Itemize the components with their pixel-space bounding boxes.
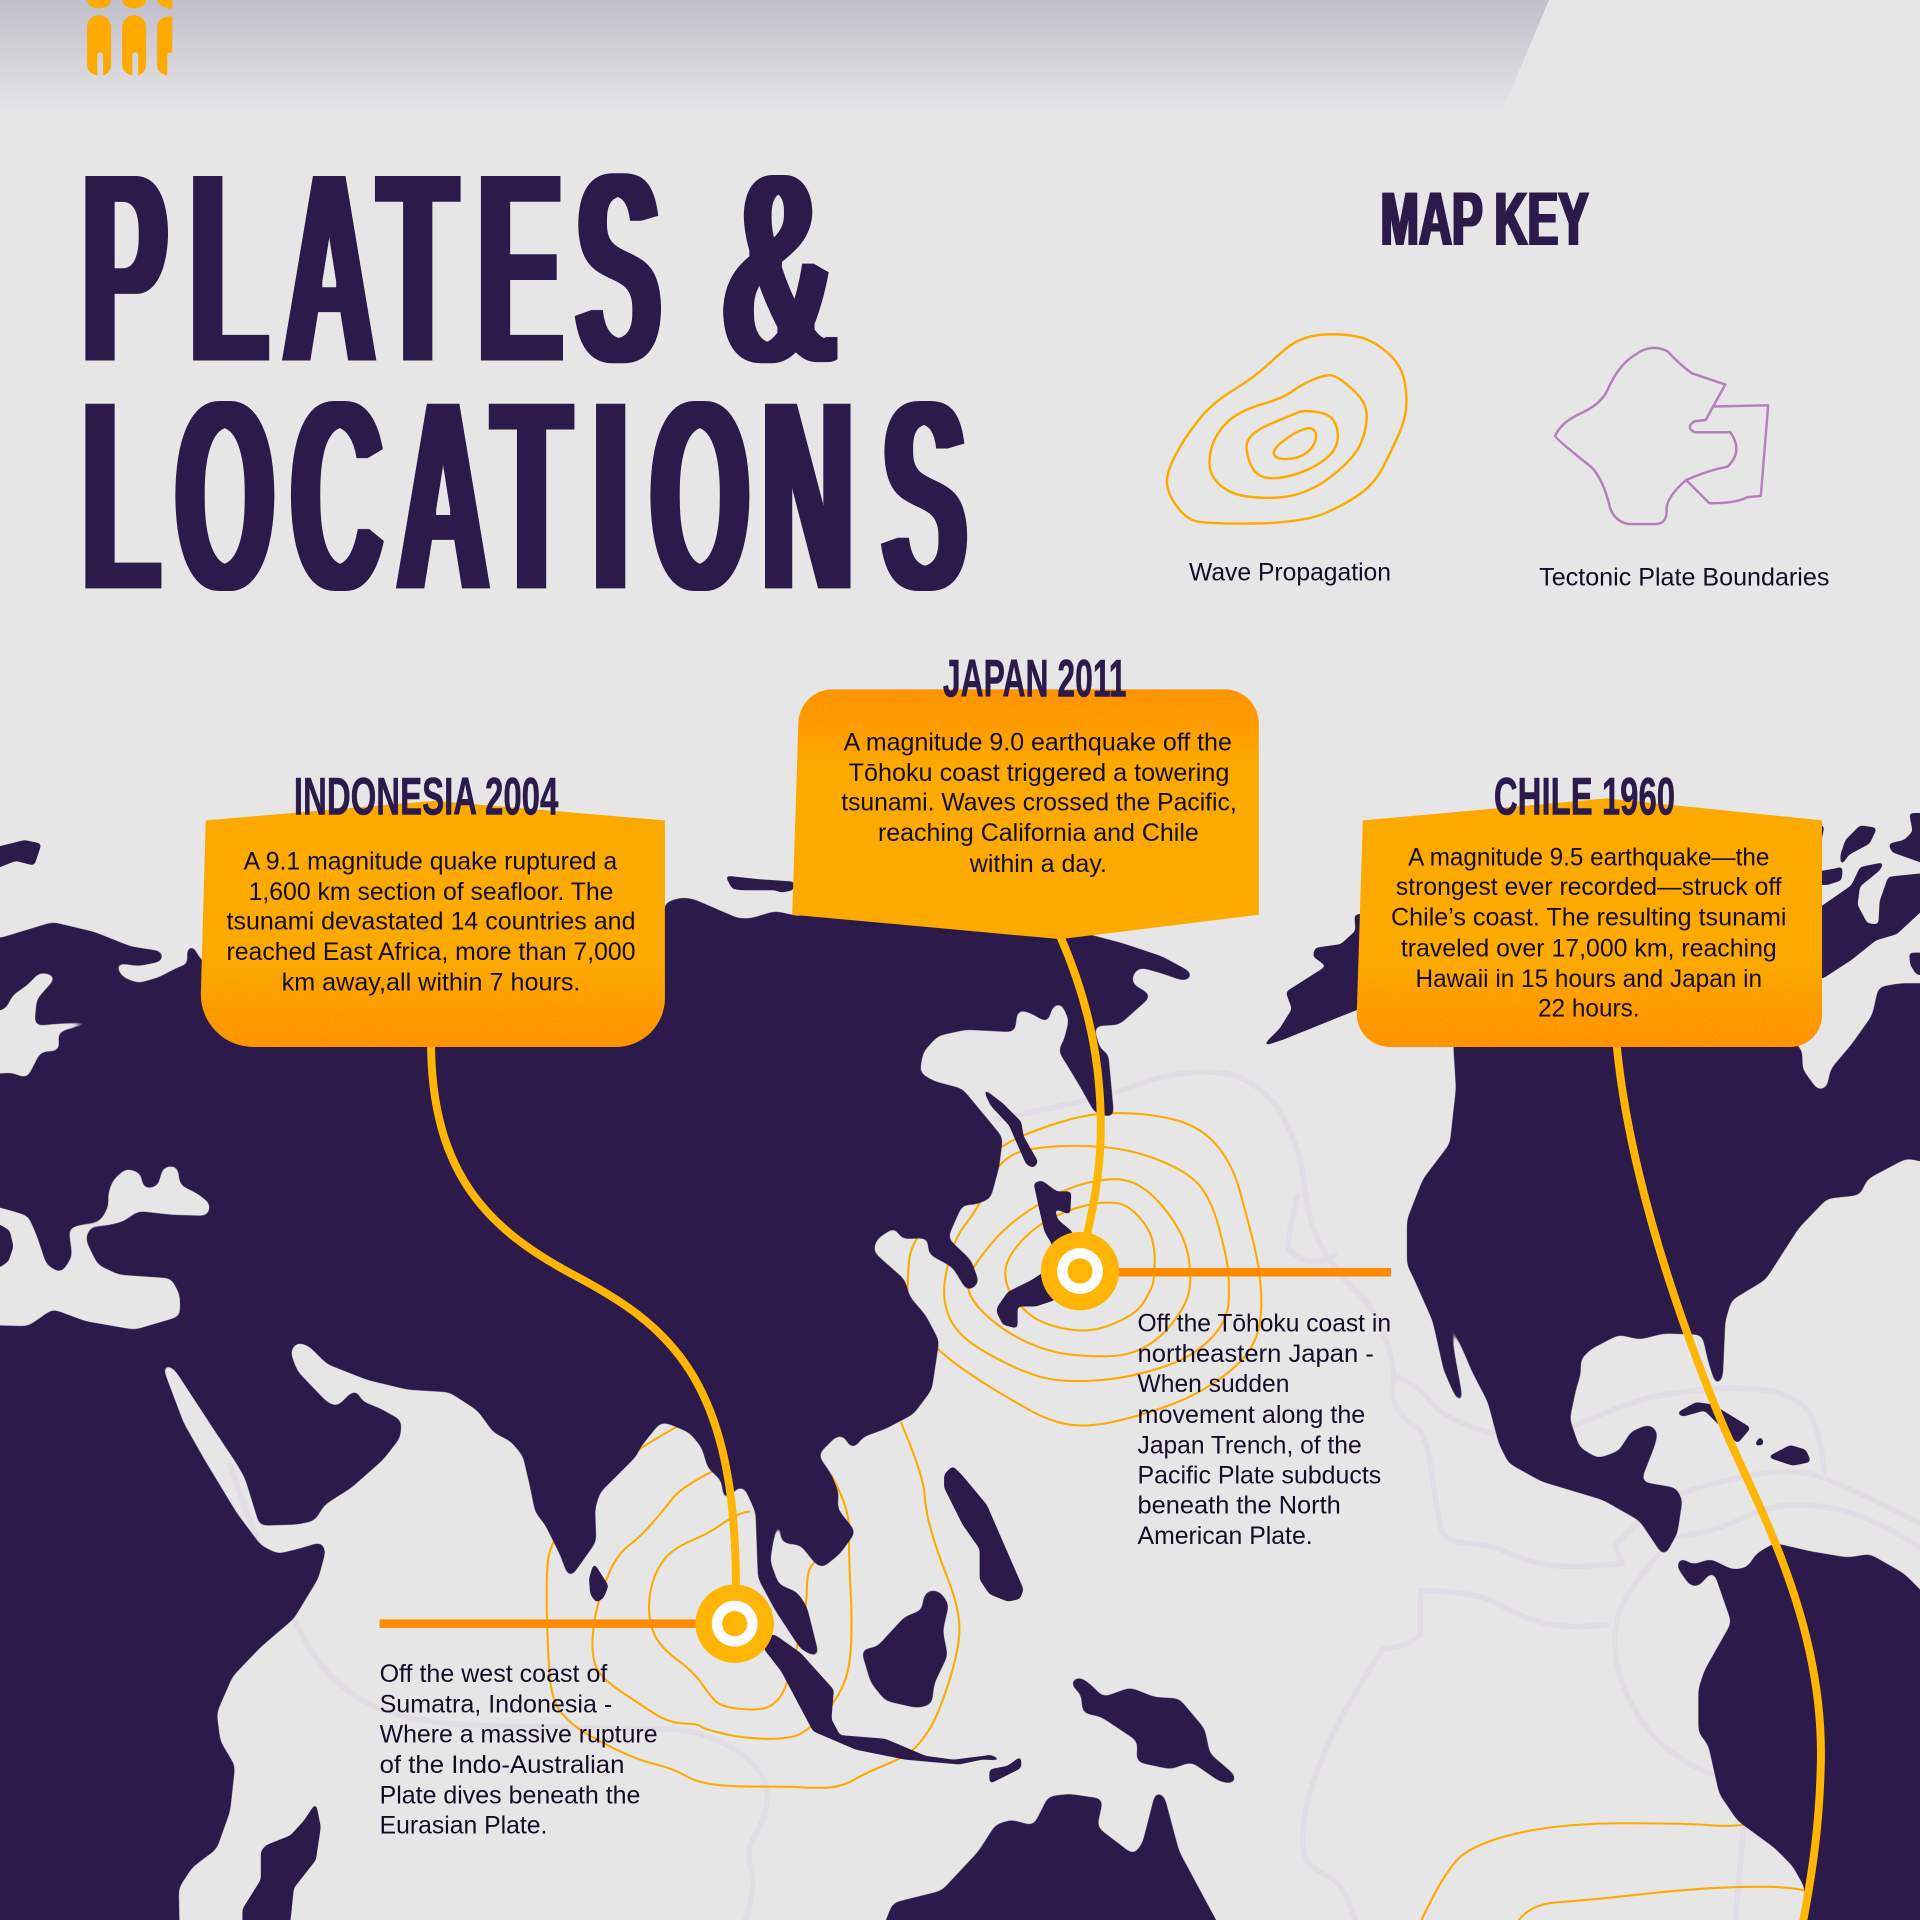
callout body: [841, 729, 1237, 878]
description: Tohoku: American Plate.: [1138, 1522, 1313, 1550]
icon: tectonic plate boundaries: [1555, 348, 1768, 524]
leader line: Chile: [1616, 1041, 1821, 1920]
callout speckle: [1357, 798, 1822, 1047]
wave propagation contours: Japan: [907, 1113, 1261, 1426]
land: Philippines: [944, 1466, 1024, 1602]
land: Sakhalin: [982, 1087, 1038, 1168]
description: Sumatra: Sumatra, Indonesia -: [380, 1690, 612, 1718]
wave propagation contours: Sumatra: [547, 1423, 959, 1788]
connector: Japan: [1096, 1268, 1391, 1277]
callout body: A magnitude 9.0 earthquake off the: [844, 729, 1232, 757]
land: Arctic sliver: [1815, 825, 1824, 845]
callout box: [1357, 798, 1822, 1047]
description: Tohoku: Off the Tōhoku coast in: [1138, 1310, 1391, 1338]
callout body: tsunami devastated 14 countries and: [227, 907, 636, 935]
land: New Guinea: [1069, 1676, 1236, 1784]
callout heading: INDONESIA 2004: [294, 767, 558, 826]
land: Sri Lanka: [589, 1562, 609, 1603]
description: Sumatra: Where a massive rupture: [380, 1720, 658, 1748]
land: Timor: [989, 1756, 1021, 1784]
label: tectonic plate boundaries: Tectonic Plate Boundaries: [1539, 563, 1829, 591]
connector: Indonesia: [380, 1619, 700, 1628]
description: Tohoku: northeastern Japan -: [1138, 1340, 1374, 1368]
callout body: traveled over 17,000 km, reaching: [1401, 934, 1777, 962]
map key heading: MAP KEY: [1381, 177, 1589, 262]
title: &: [722, 114, 837, 422]
world map: continents: [0, 898, 1920, 1920]
description: Tohoku: Pacific Plate subducts: [1138, 1461, 1381, 1489]
callout body: reached East Africa, more than 7,000: [227, 938, 636, 966]
land: Australia: [876, 1790, 1231, 1920]
land: Canadian Arctic: [1812, 862, 1920, 980]
land: western Mediterranean fragment: [0, 1224, 13, 1267]
land: Arctic fragment, north-west: [0, 840, 42, 877]
description: Sumatra: Eurasian Plate.: [380, 1812, 547, 1840]
leader line: Japan: [1060, 937, 1101, 1261]
description: Tohoku: movement along the: [1138, 1401, 1365, 1429]
callout body: Hawaii in 15 hours and Japan in: [1416, 965, 1762, 993]
callout box: [201, 801, 665, 1047]
callout heading: CHILE 1960: [1494, 767, 1675, 826]
description: Sumatra: of the Indo-Australian: [380, 1751, 624, 1779]
callout heading: JAPAN 2011: [943, 650, 1127, 709]
callout body: tsunami. Waves crossed the Pacific,: [841, 789, 1237, 817]
callout body: 22 hours.: [1538, 994, 1640, 1022]
title: [82, 114, 967, 650]
callout body: strongest ever recorded—struck off: [1396, 873, 1783, 901]
label: wave propagation: Wave Propagation: [1189, 558, 1391, 586]
callout body: Tōhoku coast triggered a towering: [849, 759, 1229, 787]
land: Hispaniola: [1767, 1445, 1811, 1466]
marker: Tohoku epicentre: [1041, 1232, 1119, 1310]
callout: Japan 2011: [792, 650, 1259, 939]
callout body: km away,all within 7 hours.: [282, 969, 580, 997]
land: Alaska: [1261, 912, 1371, 1047]
description: Sumatra: Plate dives beneath the: [380, 1782, 640, 1810]
icon: wave propagation: [1167, 334, 1406, 524]
callout body: within a day.: [969, 850, 1107, 878]
callout speckle: [201, 801, 665, 1047]
description: Sumatra: [380, 1660, 658, 1840]
land: Cuba: [1676, 1402, 1751, 1444]
land: Japan: [997, 1180, 1078, 1329]
description: Tohoku: [1138, 1310, 1391, 1550]
callout body: [1391, 844, 1787, 1022]
title: PLATES: [82, 115, 661, 422]
callout body: A 9.1 magnitude quake ruptured a: [244, 847, 617, 875]
description: Tohoku: Japan Trench, of the: [1138, 1431, 1362, 1459]
land: Arctic island 2: [1840, 825, 1877, 867]
callout body: A magnitude 9.5 earthquake—the: [1408, 844, 1769, 872]
land: Arctic island 1: [1812, 867, 1843, 885]
marker: Sumatra epicentre: [696, 1584, 774, 1663]
land: South America: [1676, 1543, 1920, 1920]
callout: Chile 1960: [1357, 767, 1822, 1047]
callout box: [792, 689, 1259, 939]
description: Tohoku: When sudden: [1138, 1370, 1289, 1398]
callout body: reaching California and Chile: [878, 819, 1199, 847]
callout body: Chile’s coast. The resulting tsunami: [1391, 904, 1787, 932]
callout body: 1,600 km section of seafloor. The: [249, 878, 613, 906]
land: Madagascar: [242, 1802, 321, 1920]
land: Eurasia and Africa: [0, 898, 1193, 1920]
land: Arctic island: [725, 876, 795, 893]
callout speckle: [792, 689, 1259, 939]
land: Arctic island 3: [1888, 813, 1920, 872]
callout: Indonesia 2004: [201, 767, 665, 1047]
title: LOCATIONS: [82, 343, 967, 650]
world map: islands and small land: [0, 813, 1920, 1920]
land: North and Central America: [1407, 983, 1920, 1558]
wave propagation contours: Pacific: [1420, 1823, 1805, 1920]
top gradient band: [0, 0, 1549, 116]
callout body: [227, 847, 636, 997]
land: Arctic island 4: [1909, 953, 1920, 977]
leader line: Indonesia: [431, 1041, 736, 1586]
map key: [1167, 177, 1829, 591]
land: Caribbean islet: [1753, 1435, 1764, 1446]
logo: [87, 0, 172, 76]
description: Sumatra: Off the west coast of: [380, 1660, 608, 1688]
description: Tohoku: beneath the North: [1138, 1491, 1341, 1519]
land: Borneo: [861, 1589, 949, 1708]
land: Sumatra and Java: [764, 1635, 1005, 1764]
tectonic plate boundary lines: [230, 1072, 1920, 1920]
